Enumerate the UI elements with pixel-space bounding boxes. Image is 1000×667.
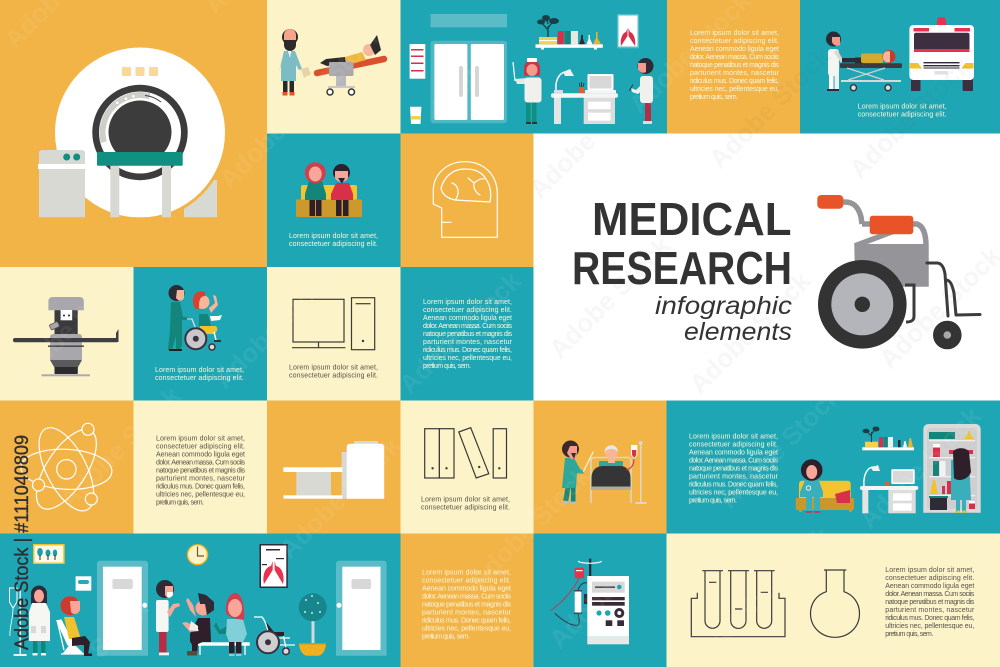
heading (572, 193, 793, 346)
icon: bed with patient (591, 445, 631, 503)
panel: atom (0, 400, 134, 534)
text block: ultricies nec, pellentesque eu, (690, 86, 779, 93)
text: Adobe Stock (3, 260, 137, 394)
icon: lung poster (260, 544, 288, 588)
icon: control unit (38, 150, 85, 217)
text block: ultricies nec, pellentesque eu, (423, 355, 512, 362)
text: Adobe Stock (853, 400, 987, 534)
icon: sign bar (431, 14, 507, 27)
icon: gurney with patient (840, 50, 902, 91)
icon: ambulance (909, 17, 974, 91)
icon: IV stand (626, 441, 646, 504)
text: Adobe Stock (543, 230, 677, 364)
text block: consectetuer adipiscing elit. (858, 112, 947, 118)
heading: elements (684, 318, 792, 346)
text block: pretium quis, sem. (156, 500, 204, 506)
text block: Aenean commodo ligula eget (156, 452, 245, 458)
panel: hospital corridor (0, 534, 400, 667)
text: Adobe Stock (213, 60, 347, 194)
heading: infographic (655, 292, 793, 320)
watermark id text: Adobe Stock | #111040809 (12, 435, 33, 650)
text block: consectetuer adipiscing elit. (422, 578, 511, 584)
text block: Lorem ipsum dolor sit amet, (421, 496, 510, 504)
text block: Aenean commodo ligula eget (885, 583, 974, 590)
icon: seated patient (57, 596, 92, 656)
panel: waiting couple (267, 134, 400, 267)
text block: consectetuer adipiscing elit. (689, 442, 778, 448)
panel: doctor's room (666, 400, 1000, 534)
text block: Lorem ipsum dolor sit amet, (690, 30, 779, 37)
text block: pretium quis, sem. (422, 634, 470, 640)
text block: Aenean commodo ligula eget (690, 46, 779, 53)
text: Adobe Stock (208, 260, 342, 394)
icon: patient on gurney (317, 35, 384, 95)
text block: natoque penatibus et magnis dis (689, 466, 778, 472)
text: Adobe Stock (53, 380, 187, 514)
text: Stock (318, 18, 390, 89)
text block: parturient montes, nascetur (156, 476, 246, 482)
text block: ridiculus mus. Donec quam felis, (689, 482, 778, 488)
text block: parturient montes, nascetur (885, 607, 975, 614)
text block: parturient montes, nascetur (423, 339, 513, 346)
icon: computer (292, 298, 375, 350)
icon: bench with sitting patients (182, 593, 250, 656)
text block: Lorem ipsum dolor sit amet, (422, 570, 511, 576)
text block (422, 570, 512, 640)
text block: Lorem ipsum dolor sit amet, (689, 434, 778, 440)
panel: doctor and patient (267, 0, 400, 134)
icon: large wheelchair (817, 195, 980, 349)
text: Adobe Stock (463, 460, 597, 594)
text block: pretium quis, sem. (689, 498, 737, 504)
text block: consectetuer adipiscing elit. (423, 307, 512, 314)
text block: natoque penatibus et magnis dis (690, 62, 780, 69)
text: Adobe (523, 126, 601, 204)
panel: wheelchair patient (134, 267, 267, 400)
icon: IV stand and doctor (10, 586, 50, 656)
icon: head with brain (433, 162, 497, 237)
text block: consectetuer adipiscing elit. (885, 575, 974, 582)
heading: RESEARCH (572, 242, 792, 294)
text block: Lorem ipsum dolor sit amet, (289, 233, 378, 240)
panel: orange text bottom (400, 534, 534, 667)
icon: right door (336, 561, 387, 656)
text block: Aenean commodo ligula eget (689, 450, 778, 456)
text block: ultricies nec, pellentesque eu, (422, 626, 511, 632)
text: Adobe Stock (843, 50, 977, 184)
icon: desk with laptop and lamp (551, 69, 618, 124)
icon: doctor at bedside (562, 440, 593, 504)
panel: scanner bed (267, 400, 400, 534)
text block: Lorem ipsum dolor sit amet, (885, 567, 974, 574)
text block (156, 436, 246, 506)
icon: shelf (862, 426, 914, 450)
panel: computer (267, 267, 400, 400)
icon: nurse (513, 58, 542, 124)
icon: atom (20, 420, 113, 519)
text block: parturient montes, nascetur (690, 70, 780, 77)
icon: scanner bed (283, 441, 384, 499)
panel: title (534, 134, 1000, 400)
text block (690, 30, 780, 101)
text block: pretium quis, sem. (690, 94, 738, 101)
text: Adobe Stock (273, 430, 407, 564)
panel: doctors' office (400, 0, 667, 134)
text: Adobe Stock (703, 40, 837, 174)
icon: nurse pushing wheelchair (168, 285, 222, 351)
text block: consectetuer adipiscing elit. (156, 444, 245, 450)
text block: ridiculus mus. Donec quam felis, (690, 78, 779, 85)
text block: consectetuer adipiscing elit. (155, 375, 244, 382)
panel: dialysis machine (534, 534, 666, 667)
text block: pretium quis, sem. (885, 631, 933, 638)
text: Adobe (423, 46, 501, 124)
text block: parturient montes, nascetur (689, 474, 779, 480)
icon: shelf with books and plant (536, 15, 603, 50)
icon: cabinet with doctor (923, 424, 981, 513)
icon: x-ray machine (13, 297, 118, 376)
text block: natoque penatibus et magnis dis (156, 468, 246, 474)
text block: dolor. Aenean massa. Cum sociis (422, 594, 512, 600)
text block (155, 367, 244, 382)
text block: natoque penatibus et magnis dis (423, 331, 512, 338)
icon: test tubes (691, 571, 785, 637)
text block: Lorem ipsum dolor sit amet, (156, 436, 245, 442)
panel: cream text (134, 400, 267, 534)
text block: parturient montes, nascetur (422, 610, 512, 616)
icon: doctor writing (629, 58, 654, 124)
icon: framed picture (33, 544, 65, 564)
text block: ridiculus mus. Donec quam felis, (423, 347, 512, 354)
icon: potted tree (299, 593, 327, 656)
text block: consectetuer adipiscing elit. (421, 504, 510, 512)
text: Adobe Stock (683, 265, 817, 399)
panel: scanner (0, 0, 267, 267)
icon: doctor on sofa (796, 459, 854, 513)
text block: dolor. Aenean massa. Cum sociis (689, 458, 778, 464)
text block: pretium quis, sem. (423, 363, 471, 370)
text: Adobe (543, 576, 621, 654)
text block: Aenean commodo ligula eget (422, 586, 511, 592)
text block: dolor. Aenean massa. Cum sociis (423, 323, 512, 330)
panel: binders (400, 400, 534, 534)
icon: desk (860, 465, 918, 513)
text block: dolor. Aenean massa. Cum sociis (690, 54, 780, 61)
icon: lung poster (617, 14, 639, 48)
text block (689, 434, 779, 504)
text block (289, 233, 378, 248)
text block: Lorem ipsum dolor sit amet, (858, 104, 947, 110)
text block: dolor. Aenean massa. Cum sociis (156, 460, 246, 466)
heading: MEDICAL (592, 193, 792, 245)
icon: scanner side block (184, 180, 217, 217)
text: Adobe Stock (393, 265, 527, 399)
text: Adobe Stock (703, 520, 837, 654)
text block: natoque penatibus et magnis dis (885, 599, 975, 606)
text block: ridiculus mus. Donec quam felis, (885, 615, 974, 622)
icon: glass (410, 107, 421, 124)
text block: natoque penatibus et magnis dis (422, 602, 512, 608)
text: Stock (83, 593, 155, 664)
icon: flask (810, 570, 860, 637)
text block: ultricies nec, pellentesque eu, (885, 623, 974, 630)
text block: Lorem ipsum dolor sit amet, (423, 299, 512, 306)
text: Adobe Stock (713, 380, 847, 514)
panel: teal text (400, 267, 534, 400)
panel: patient in bed (534, 400, 666, 534)
panel: lab glassware (666, 534, 1000, 667)
text block: ridiculus mus. Donec quam felis, (422, 618, 511, 624)
icon: wall label (76, 576, 91, 591)
text block (885, 567, 975, 638)
icon: doctor with mask (156, 580, 180, 655)
text block (423, 299, 513, 370)
icon: double door (431, 41, 507, 123)
icon: dialysis machine (551, 559, 629, 644)
text block: Lorem ipsum dolor sit amet, (289, 364, 378, 372)
icon: doctor (279, 29, 311, 96)
text block: consectetuer adipiscing elit. (289, 372, 378, 380)
panel: orange text top (667, 0, 800, 134)
icon: wheelchair (254, 617, 295, 655)
text block: consectetuer adipiscing elit. (289, 241, 378, 248)
icon: scanner body (52, 44, 228, 227)
icon: scanner table (97, 152, 183, 217)
text block: dolor. Aenean massa. Cum sociis (885, 591, 975, 598)
icon: orderly (826, 32, 843, 91)
icon: wall chart (410, 44, 425, 79)
icon: binders (425, 428, 506, 478)
text block: Lorem ipsum dolor sit amet, (155, 367, 244, 374)
text block (421, 496, 510, 512)
text block (858, 104, 947, 118)
text block: ultricies nec, pellentesque eu, (689, 490, 778, 496)
text block: ridiculus mus. Donec quam felis, (156, 484, 245, 490)
text block (289, 364, 378, 380)
text block: ultricies nec, pellentesque eu, (156, 492, 245, 498)
icon: left door (97, 561, 148, 656)
icon: couple on sofa (296, 162, 362, 217)
icon: clock (188, 545, 208, 565)
panel: brain icon (400, 134, 534, 267)
panel: x-ray machine (0, 267, 134, 400)
text block: consectetuer adipiscing elit. (690, 38, 779, 45)
panel: ambulance (800, 0, 1000, 134)
text block: Aenean commodo ligula eget (423, 315, 512, 322)
